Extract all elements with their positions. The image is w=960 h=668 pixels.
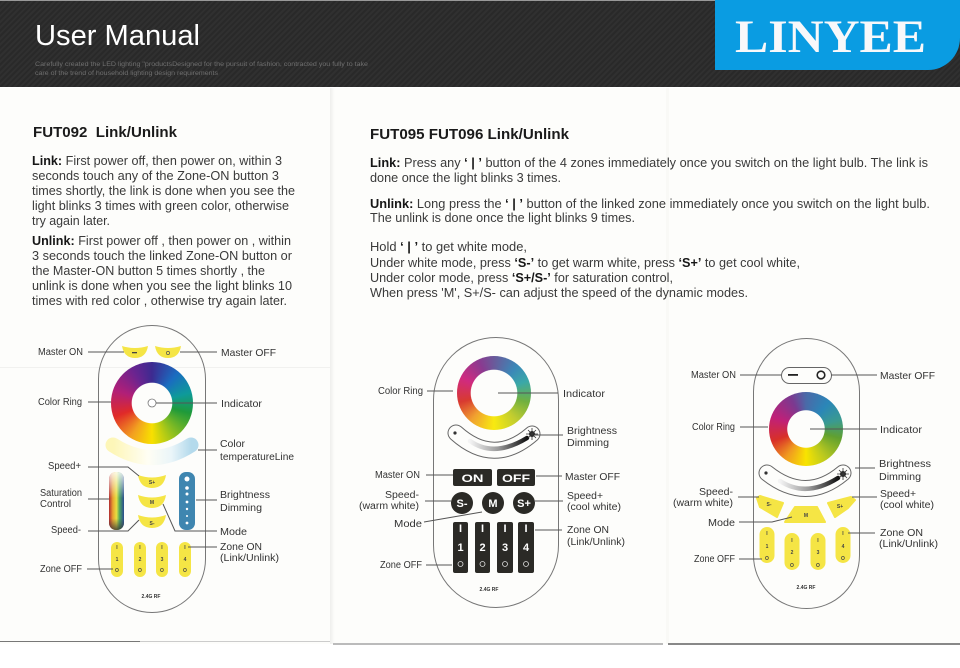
- zone buttons: 2: [791, 550, 794, 556]
- labels left: Mode: [708, 518, 735, 529]
- paragraph: modes: When press 'M', S+/S- can adjust the speed of the dynamic modes.: [370, 286, 748, 300]
- brightness slider: [453, 428, 538, 450]
- labels right: Indicator: [221, 398, 263, 410]
- rf mark: 2.4G RF: [480, 587, 498, 593]
- labels left: Speed+: [48, 461, 81, 472]
- labels right: (cool white): [880, 499, 934, 511]
- leader lines: [738, 375, 877, 559]
- paragraph: modes: Under color mode, press ‘S+/S-’ for saturation control,: [370, 271, 673, 285]
- labels left: Control: [40, 499, 71, 510]
- speed and mode buttons: S-: [456, 498, 468, 510]
- speed and mode buttons: S-: [766, 502, 772, 508]
- labels left: Speed-: [699, 487, 733, 498]
- labels right: Zone ON: [220, 541, 262, 553]
- remote body outline: [98, 326, 206, 612]
- text block: FUT092: [32, 125, 295, 308]
- speed and mode buttons: M: [150, 500, 154, 506]
- labels left: Speed-: [51, 525, 81, 536]
- speed and mode buttons: [451, 492, 535, 514]
- labels left: Mode: [394, 519, 422, 530]
- labels right: [879, 370, 938, 550]
- paragraph: unlink: Unlink: Long press the ‘ | ’ button of the linked zone immediately once you switch on the light bulb.: [370, 197, 930, 211]
- subtitle text: Carefully created the LED lighting "productsDesigned for the pursuit of fashion, contracted you fully to take: [35, 61, 368, 68]
- zone buttons: I: [766, 531, 768, 537]
- indicator dot: [148, 399, 156, 407]
- zone buttons: [111, 542, 191, 577]
- zone buttons: I: [481, 523, 484, 535]
- zone buttons: I: [139, 545, 141, 551]
- labels right: Zone ON: [880, 527, 923, 539]
- saturation control: [109, 472, 124, 530]
- zone buttons: I: [791, 538, 793, 544]
- labels left: (warm white): [359, 501, 419, 512]
- labels left: [673, 370, 736, 565]
- labels left: Master ON: [375, 470, 420, 481]
- speed and mode buttons: [757, 496, 855, 522]
- labels right: Brightness: [879, 458, 931, 470]
- zone buttons: O: [115, 568, 119, 574]
- labels left: Speed-: [385, 490, 419, 501]
- labels left: [359, 386, 423, 571]
- zone buttons: 3: [502, 542, 508, 554]
- labels right: Master OFF: [880, 370, 935, 382]
- labels left: Master ON: [691, 370, 736, 381]
- labels right: Speed+: [880, 488, 916, 500]
- zone buttons: [453, 522, 534, 573]
- paragraph: unlink: times with red color , otherwise try again later.: [32, 294, 287, 308]
- labels left: Saturation: [40, 488, 82, 499]
- color ring: [111, 362, 193, 444]
- paragraph: unlink: [370, 197, 930, 225]
- labels right: (Link/Unlink): [220, 552, 279, 564]
- zone buttons: I: [116, 545, 118, 551]
- labels right: Indicator: [563, 388, 606, 400]
- labels left: Master ON: [38, 347, 83, 358]
- paragraph: unlink: [32, 234, 292, 308]
- zone buttons: 3: [817, 550, 820, 556]
- paragraph: link: [370, 156, 928, 185]
- labels right: Master OFF: [221, 347, 276, 359]
- zone buttons: 1: [766, 544, 769, 550]
- labels left: Color Ring: [692, 422, 735, 433]
- labels left: Zone OFF: [380, 560, 422, 571]
- remote diagram: FUT092: [38, 325, 294, 613]
- zone buttons: I: [842, 531, 844, 537]
- speed and mode buttons: [138, 475, 166, 528]
- zone buttons: O: [138, 568, 142, 574]
- rf mark: 2.4G RF: [797, 585, 815, 591]
- labels right: Dimming: [879, 471, 921, 483]
- color temperature line: [113, 445, 191, 458]
- labels right: Speed+: [567, 490, 603, 502]
- labels right: Master OFF: [565, 471, 620, 483]
- paragraph: modes: Under white mode, press ‘S-’ to get warm white, press ‘S+’ to get cool white,: [370, 256, 800, 270]
- speed and mode buttons: S+: [149, 480, 155, 486]
- subtitle text: care of the trend of household lighting design requirements: [35, 70, 219, 77]
- paragraph: unlink: unlink is done when you see the light blinks 10: [32, 279, 292, 293]
- labels left: (warm white): [673, 498, 733, 509]
- zone buttons: 4: [184, 557, 187, 563]
- zone buttons: 2: [139, 557, 142, 563]
- master buttons: [453, 469, 535, 486]
- labels right: Zone ON: [567, 524, 609, 536]
- master pill button: [782, 368, 832, 384]
- brightness slider: [764, 468, 849, 489]
- labels right: (cool white): [567, 501, 621, 513]
- zone buttons: 4: [842, 544, 845, 550]
- labels right: Brightness: [567, 425, 617, 437]
- rf mark: 2.4G RF: [142, 594, 160, 600]
- labels right: Brightness: [220, 489, 270, 501]
- paragraph: link: done once the light blinks 3 times.: [370, 171, 561, 185]
- labels right: Mode: [220, 526, 247, 538]
- zone buttons: I: [459, 523, 462, 535]
- subtitle text: [35, 61, 368, 77]
- paragraph: unlink: The unlink is done once the light blinks 9 times.: [370, 211, 635, 225]
- paragraph: modes: Hold ‘ | ’ to get white mode,: [370, 240, 527, 254]
- labels right: (Link/Unlink): [567, 536, 625, 548]
- logo panel: [715, 0, 960, 70]
- paragraph: unlink: Unlink: First power off , then power on , within: [32, 234, 291, 248]
- paragraph: link: [32, 154, 295, 228]
- labels right: Indicator: [880, 424, 923, 436]
- zone buttons: O: [790, 563, 794, 569]
- leader lines: [424, 391, 563, 565]
- text block: FUT095 FUT096: [370, 127, 930, 300]
- title: User Manual: [35, 20, 200, 52]
- zone buttons: 1: [116, 557, 119, 563]
- master buttons: ON: [462, 473, 484, 485]
- paragraph: unlink: 3 seconds touch the linked Zone-ON button or: [32, 249, 292, 263]
- paragraph: link: light blinks 3 times with green color, otherwise: [32, 199, 289, 213]
- remote diagram: FUT096: [673, 338, 938, 609]
- zone buttons: O: [183, 568, 187, 574]
- speed and mode buttons: M: [804, 513, 808, 519]
- color ring: [457, 356, 531, 430]
- paragraph: link: Link: First power off, then power on, within 3: [32, 154, 282, 168]
- labels left: Color Ring: [38, 397, 82, 408]
- zone buttons: O: [841, 556, 845, 562]
- master buttons: OFF: [502, 473, 530, 485]
- labels left: [38, 347, 83, 575]
- speed and mode buttons: M: [488, 498, 498, 510]
- zone buttons: I: [503, 523, 507, 535]
- paragraph: link: try again later.: [32, 214, 110, 228]
- zone buttons: I: [184, 545, 186, 551]
- labels right: Dimming: [220, 502, 262, 514]
- labels left: Zone OFF: [40, 564, 82, 575]
- zone buttons: I: [817, 538, 819, 544]
- speed and mode buttons: S-: [150, 521, 155, 527]
- zone buttons: I: [161, 545, 163, 551]
- leader lines: [87, 352, 217, 569]
- labels right: [220, 347, 294, 564]
- zone buttons: O: [765, 556, 769, 562]
- paragraph: link: Link: Press any ‘ | ’ button of the 4 zones immediately once you switch on the light bulb. The link is: [370, 156, 928, 170]
- zone buttons: I: [524, 523, 528, 535]
- remote body outline: [434, 338, 558, 608]
- brightness dimming bar: [179, 472, 195, 530]
- paragraph: link: times shortly, the link is done when you see the: [32, 184, 295, 198]
- labels right: [563, 388, 625, 548]
- zone buttons: [760, 527, 850, 570]
- labels left: Color Ring: [378, 386, 423, 397]
- remote body outline: [754, 338, 860, 608]
- zone buttons: 1: [457, 542, 464, 554]
- header banner: [0, 0, 960, 87]
- heading: FUT095 FUT096: FUT095 FUT096 Link/Unlink: [370, 127, 570, 143]
- paragraph: link: seconds touch any of the Zone-ON button 3: [32, 169, 279, 183]
- labels left: Zone OFF: [694, 554, 735, 565]
- speed and mode buttons: S+: [837, 504, 843, 510]
- zone buttons: O: [160, 568, 164, 574]
- paragraph: modes: [370, 240, 800, 300]
- labels right: Dimming: [567, 437, 609, 449]
- heading: FUT092: FUT092 Link/Unlink: [33, 125, 178, 141]
- labels right: Color: [220, 438, 245, 450]
- remote diagram: FUT095: [359, 337, 625, 608]
- zone buttons: 2: [479, 542, 486, 554]
- master buttons: [122, 346, 181, 358]
- zone buttons: 4: [523, 542, 530, 554]
- zone buttons: 3: [161, 557, 164, 563]
- labels right: (Link/Unlink): [879, 538, 938, 550]
- color ring: [769, 392, 843, 466]
- labels right: temperatureLine: [220, 451, 294, 463]
- zone buttons: O: [816, 563, 820, 569]
- speed and mode buttons: S+: [517, 498, 531, 510]
- paragraph: unlink: the Master-ON button 5 times shortly , the: [32, 264, 265, 278]
